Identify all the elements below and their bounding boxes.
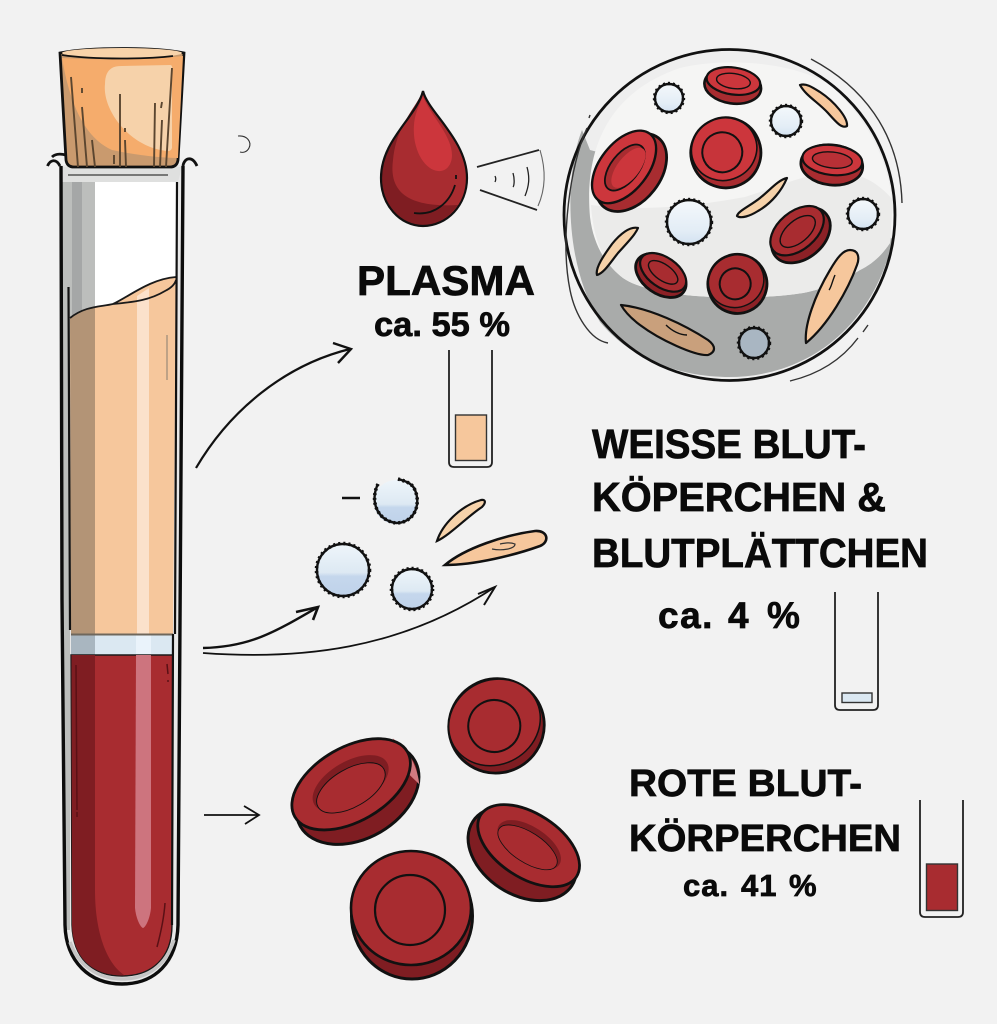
blood drop icon bbox=[381, 91, 467, 226]
title: white cells and platelets: 4 bbox=[728, 595, 750, 636]
title: white cells and platelets: BLUTPLÄTTCHEN bbox=[592, 530, 928, 576]
red cell 7 bbox=[698, 245, 777, 323]
title: red cells: ROTE BLUT- bbox=[629, 763, 862, 805]
gauge: white cells 4 percent bbox=[835, 592, 878, 710]
title: red cells: % bbox=[789, 868, 818, 903]
rim line bbox=[68, 174, 168, 176]
platelets in sphere bbox=[597, 84, 858, 355]
title: red cells: KÖRPERCHEN bbox=[629, 817, 901, 860]
small stray mark bbox=[238, 136, 250, 152]
red cell 2 bbox=[578, 117, 681, 225]
arrow to plasma bbox=[196, 343, 351, 468]
tube glass bbox=[60, 165, 184, 985]
red blood cell C bbox=[451, 786, 595, 920]
tube outline bbox=[61, 166, 183, 984]
title: red cells: ca. bbox=[683, 868, 729, 903]
zoom cone lines bbox=[477, 150, 544, 210]
red blood cell B bbox=[431, 661, 562, 791]
red cell 5 bbox=[760, 195, 841, 274]
red cell 3 bbox=[679, 106, 772, 199]
sphere body bbox=[564, 50, 895, 380]
gauge: plasma 55 percent bbox=[449, 350, 492, 467]
title: white cells and platelets: ca. bbox=[658, 595, 714, 636]
title: red cells: 41 bbox=[741, 868, 777, 903]
title: plasma: PLASMA bbox=[357, 257, 535, 304]
test tube bbox=[48, 154, 197, 985]
title: plasma bbox=[357, 257, 535, 344]
red cell layer bbox=[71, 655, 173, 976]
left and right lip bbox=[48, 154, 197, 166]
red blood cell A bbox=[276, 719, 437, 865]
title: white cells and platelets: % bbox=[767, 595, 801, 636]
magnified blood sphere bbox=[564, 50, 902, 381]
cork stopper bbox=[60, 48, 184, 167]
title: red cells bbox=[629, 763, 901, 903]
arrow to red cells bbox=[204, 806, 259, 824]
title: white cells and platelets bbox=[592, 421, 928, 636]
white cells in sphere bbox=[654, 84, 878, 358]
plasma layer bbox=[70, 277, 176, 634]
title: plasma: ca. 55 % bbox=[374, 306, 510, 344]
buffy coat layer bbox=[71, 634, 173, 655]
white cells and platelets group bbox=[316, 479, 546, 610]
red cell 1 bbox=[702, 64, 764, 107]
red blood cell D bbox=[351, 851, 472, 979]
title: white cells and platelets: WEISSE BLUT- bbox=[592, 421, 866, 467]
gauge: red cells 41 percent bbox=[920, 800, 963, 917]
red cell 6 bbox=[628, 244, 695, 306]
outer motion lines bbox=[566, 59, 902, 381]
arrows to white cells and platelets bbox=[203, 587, 495, 655]
red cell 4 bbox=[799, 142, 865, 188]
title: white cells and platelets: KÖPERCHEN & bbox=[592, 474, 886, 520]
